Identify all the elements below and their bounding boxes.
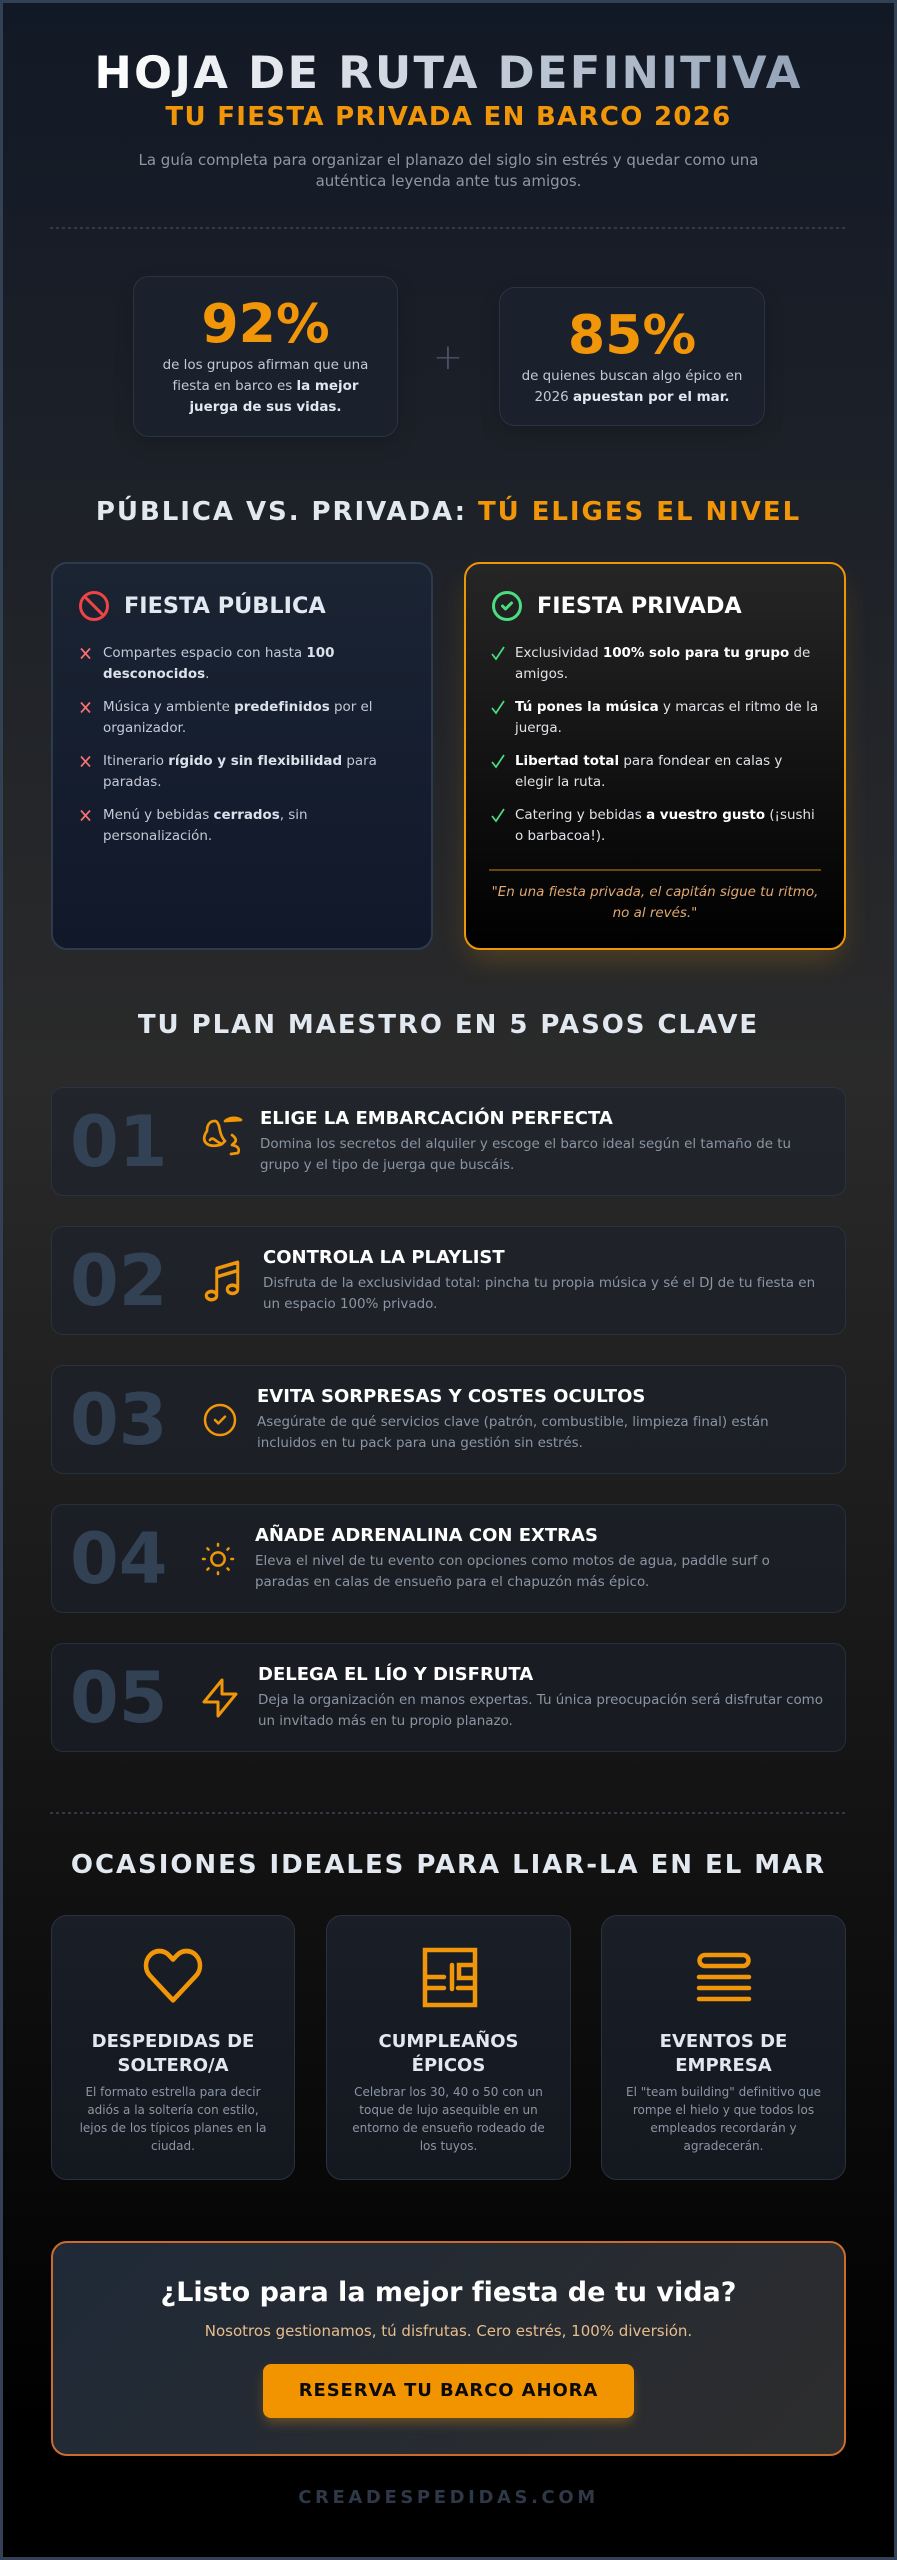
card title: SOLTERO/A [118, 2055, 228, 2076]
card text: agradecerán. [684, 2139, 763, 2153]
icon: calendar [422, 1948, 478, 2008]
step 2 number: 02 [70, 1240, 167, 1322]
step 3 text: Asegúrate de qué servicios clave (patrón, combustible, limpieza final) están [257, 1415, 769, 1430]
heading: comparison: PÚBLICA VS. PRIVADA: TÚ ELIGES EL NIVEL [96, 497, 801, 527]
CTA text: Nosotros gestionamos, tú disfrutas. Cero estrés, 100% diversión. [205, 2322, 692, 2340]
panel: fiesta privada [464, 562, 846, 950]
step 1 text: Domina los secretos del alquiler y escoge el barco ideal según el tamaño de tu [260, 1137, 791, 1152]
item 1 [80, 646, 334, 682]
item 3 [491, 754, 782, 790]
item 2: Música y ambiente predefinidos por el [103, 700, 373, 715]
item 3: paradas. [103, 775, 162, 790]
card text: toque de lujo asequible en un [359, 2103, 538, 2117]
card title [379, 2030, 518, 2076]
stat text: de quienes buscan algo épico en [522, 369, 742, 384]
card text: empleados recordarán y [650, 2121, 797, 2135]
item 4: Menú y bebidas cerrados, sin [103, 808, 308, 823]
card text: Celebrar los 30, 40 o 50 con un [354, 2085, 543, 2099]
item 3: Itinerario rígido y sin flexibilidad para [103, 754, 377, 769]
item 2 [491, 700, 818, 736]
item 4: personalización. [103, 829, 212, 844]
intro text [138, 151, 758, 190]
card text [80, 2085, 266, 2153]
step 2 [51, 1226, 846, 1335]
card heading: FIESTA PÚBLICA [124, 593, 326, 619]
icon: check circle [204, 1404, 236, 1436]
item 3: elegir la ruta. [515, 775, 605, 790]
footer brand: CREADESPEDIDAS.COM [298, 2487, 599, 2508]
panel: fiesta pública [51, 562, 433, 950]
card text: los tuyos. [420, 2139, 477, 2153]
step 5 text: Deja la organización en manos expertas. Tu única preocupación será disfrutar como [258, 1693, 823, 1708]
panel: eventos [601, 1915, 846, 2180]
heading: plan: TU PLAN MAESTRO EN 5 PASOS CLAVE [138, 1010, 759, 1040]
icon: bolt [202, 1678, 238, 1718]
card title: DESPEDIDAS DE [92, 2031, 254, 2052]
step 1 [51, 1087, 846, 1196]
stat text: de los grupos afirman que una [163, 358, 368, 373]
card title: EMPRESA [675, 2055, 772, 2076]
step 5 title: DELEGA EL LÍO Y DISFRUTA [258, 1664, 533, 1685]
icon: check circle [492, 591, 522, 621]
item 4 [80, 808, 308, 844]
stat text [163, 358, 368, 415]
card title: EVENTOS DE [660, 2031, 787, 2052]
step 4 text [255, 1554, 770, 1590]
step 4 text: Eleva el nivel de tu evento con opciones como motos de agua, paddle surf o [255, 1554, 770, 1569]
card title [660, 2031, 787, 2076]
stat text: juerga de sus vidas. [189, 400, 342, 415]
step 5 text: un invitado más en tu propio planazo. [258, 1714, 513, 1729]
item 1: Exclusividad 100% solo para tu grupo de [515, 646, 810, 661]
step 5 [51, 1643, 846, 1752]
card text: El formato estrella para decir [85, 2085, 261, 2099]
card text [626, 2085, 821, 2153]
intro text: auténtica leyenda ante tus amigos. [316, 172, 581, 190]
item 4 [491, 808, 815, 844]
icon: sun [202, 1542, 234, 1576]
icon: heart [144, 1948, 202, 2003]
card text: El "team building" definitivo que [626, 2085, 821, 2099]
stat text [522, 369, 742, 405]
step 4 text: paradas en calas de ensueño para el chapuzón más épico. [255, 1575, 649, 1590]
item 1 [491, 646, 810, 682]
card title [92, 2031, 254, 2076]
stat number: 85% [568, 303, 696, 366]
stat card: 85% [499, 287, 765, 426]
item 3 [80, 754, 377, 790]
stat text: 2026 apuestan por el mar. [534, 390, 730, 405]
card heading: FIESTA PRIVADA [537, 593, 742, 619]
item 2 [80, 700, 373, 736]
card title: ÉPICOS [412, 2055, 485, 2076]
title: HOJA DE RUTA DEFINITIVA [94, 46, 803, 99]
heading: occasions: OCASIONES IDEALES PARA LIAR-LA EN EL MAR [71, 1850, 826, 1880]
card text: rompe el hielo y que todos los [633, 2103, 814, 2117]
card text: lejos de los típicos planes en la [80, 2121, 266, 2135]
item 4: Catering y bebidas a vuestro gusto (¡sushi [515, 808, 815, 823]
icon: stacked lines [696, 1952, 752, 2002]
stat card: 92% [133, 276, 398, 437]
step 2 text: un espacio 100% privado. [263, 1297, 437, 1312]
plus sign: + [433, 337, 463, 378]
card text [352, 2085, 545, 2153]
subtitle: TU FIESTA PRIVADA EN BARCO 2026 [165, 102, 732, 132]
quote: "En una fiesta privada, el capitán sigue tu ritmo, [492, 885, 818, 900]
CTA button [263, 2364, 634, 2418]
card title: CUMPLEAÑOS [379, 2031, 518, 2052]
item 3: Libertad total para fondear en calas y [515, 754, 782, 769]
step 1 number: 01 [70, 1101, 167, 1183]
step 3 text [257, 1415, 769, 1451]
card text: entorno de ensueño rodeado de [352, 2121, 545, 2135]
card text: ciudad. [151, 2139, 195, 2153]
panel: despedidas [51, 1915, 295, 2180]
step 3 text: incluidos en tu pack para una gestión sin estrés. [257, 1436, 583, 1451]
step 1 text: grupo y el tipo de juerga que buscáis. [260, 1158, 514, 1173]
CTA button: RESERVA TU BARCO AHORA [299, 2380, 598, 2401]
icon: prohibited [79, 591, 109, 621]
step 4 number: 04 [70, 1518, 167, 1600]
step 2 title: CONTROLA LA PLAYLIST [263, 1247, 505, 1268]
step 3 [51, 1365, 846, 1474]
step 5 number: 05 [70, 1657, 167, 1739]
card text: adiós a la soltería con estilo, [87, 2103, 259, 2117]
item 2: organizador. [103, 721, 186, 736]
quote: no al revés." [613, 906, 697, 921]
item 1: desconocidos. [103, 667, 209, 682]
stat number: 92% [201, 292, 330, 355]
step 3 number: 03 [70, 1379, 167, 1461]
item 2: juerga. [515, 721, 562, 736]
intro text: La guía completa para organizar el planazo del siglo sin estrés y quedar como una [138, 151, 758, 169]
call to action panel [51, 2241, 846, 2456]
step 2 text: Disfruta de la exclusividad total: pincha tu propia música y sé el DJ de tu fiesta en [263, 1276, 815, 1291]
icon: music [204, 1260, 240, 1302]
step 1 text [260, 1137, 791, 1173]
item 1: Compartes espacio con hasta 100 [103, 646, 334, 661]
step 1 title: ELIGE LA EMBARCACIÓN PERFECTA [260, 1108, 613, 1129]
item 2: Tú pones la música y marcas el ritmo de la [515, 700, 818, 715]
CTA heading: ¿Listo para la mejor fiesta de tu vida? [161, 2277, 736, 2308]
stat text: fiesta en barco es la mejor [173, 379, 358, 394]
item 4: o barbacoa!). [515, 829, 605, 844]
item 1: amigos. [515, 667, 568, 682]
step 3 title: EVITA SORPRESAS Y COSTES OCULTOS [257, 1386, 645, 1407]
quote [492, 885, 818, 921]
step 2 text [263, 1276, 815, 1312]
step 5 text [258, 1693, 823, 1729]
step 4 title: AÑADE ADRENALINA CON EXTRAS [255, 1525, 598, 1546]
panel: cumpleaños [326, 1915, 571, 2180]
step 4 [51, 1504, 846, 1613]
